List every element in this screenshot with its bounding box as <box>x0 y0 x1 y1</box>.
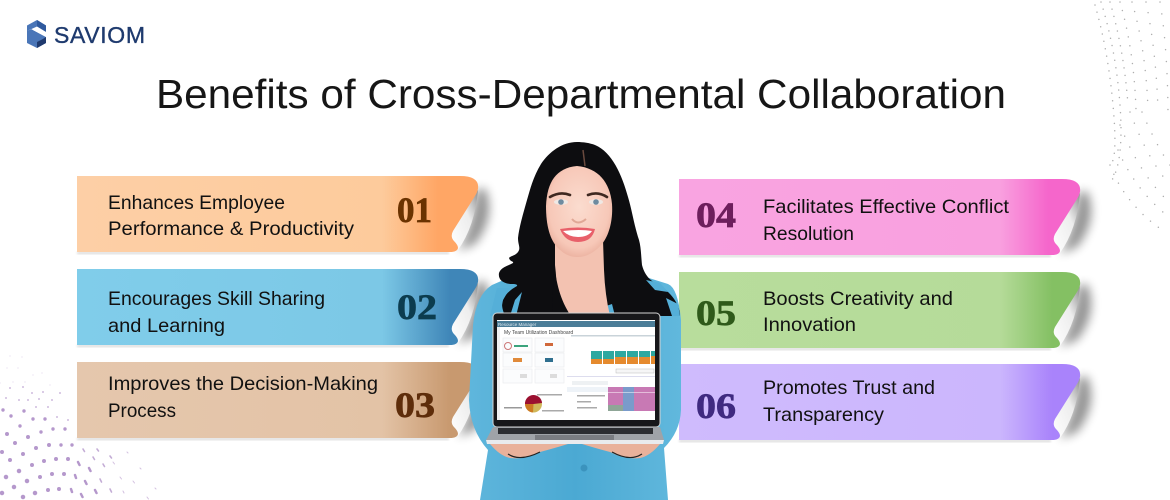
panel: 02 skill sharing: Encourages Skill Sharing <box>108 288 325 310</box>
laptop lid <box>493 313 660 427</box>
panel: 06 trust: Transparency <box>763 404 884 426</box>
panel: 03 decision making: 03 <box>395 385 435 425</box>
shirt <box>469 272 681 500</box>
panel: 03 decision making: Improves the Decision-Making <box>108 373 378 395</box>
panel: 01 employee performance <box>77 176 489 254</box>
laptop screen: My Team Utilization Dashboard <box>504 330 573 336</box>
heatmap table <box>567 376 655 411</box>
eyebrows <box>550 193 607 197</box>
panel: 05 creativity: Innovation <box>763 314 856 336</box>
pie chart <box>504 394 564 412</box>
panel: 03 decision making <box>77 362 489 440</box>
panel: 04 conflict resolution: Facilitates Effective Conflict <box>763 196 1010 218</box>
hair <box>499 142 680 316</box>
dot pattern: top right <box>1095 2 1170 232</box>
neck <box>555 240 610 316</box>
icon: logo hexagon <box>27 20 46 48</box>
stacked bar chart <box>571 335 655 373</box>
panel: 04 conflict resolution: 04 <box>696 195 736 235</box>
panel: 01 employee performance: Enhances Employee <box>108 192 285 214</box>
hair strand over neck <box>552 262 571 316</box>
mouth <box>560 228 595 242</box>
title: Benefits of Cross-Departmental Collaboration <box>156 71 1006 117</box>
panel: 02 skill sharing <box>77 269 489 347</box>
dashboard cards <box>503 338 564 383</box>
panel: 05 creativity: 05 <box>696 293 736 333</box>
eyes <box>554 199 603 205</box>
panel: 05 creativity <box>679 272 1091 350</box>
face <box>546 166 612 257</box>
dot pattern: bottom left <box>0 356 156 499</box>
panel: 04 conflict resolution: Resolution <box>763 223 854 245</box>
nose <box>572 219 586 222</box>
logo <box>27 20 145 48</box>
laptop base <box>486 427 664 444</box>
panel: 04 conflict resolution <box>679 179 1091 257</box>
panel: 02 skill sharing: and Learning <box>108 315 225 337</box>
panel: 01 employee performance: 01 <box>397 190 432 230</box>
shirt patches between hair strands <box>490 280 680 316</box>
panel: 06 trust: Promotes Trust and <box>763 377 935 399</box>
panel: 06 trust: 06 <box>696 386 736 426</box>
laptop screen: Resource Manager <box>498 322 537 327</box>
panel: 05 creativity: Boosts Creativity and <box>763 288 953 310</box>
panel: 01 employee performance: Performance & Productivity <box>108 218 354 240</box>
woman holding laptop <box>469 142 681 500</box>
logo wordmark: SAVIOM <box>54 22 145 48</box>
panel: 06 trust <box>679 364 1091 442</box>
hair part <box>583 150 585 166</box>
panel: 03 decision making: Process <box>108 400 176 422</box>
forearms and hands <box>490 444 568 458</box>
shirt button <box>580 464 588 472</box>
panel: 02 skill sharing: 02 <box>397 287 437 327</box>
laptop screen <box>497 320 655 420</box>
